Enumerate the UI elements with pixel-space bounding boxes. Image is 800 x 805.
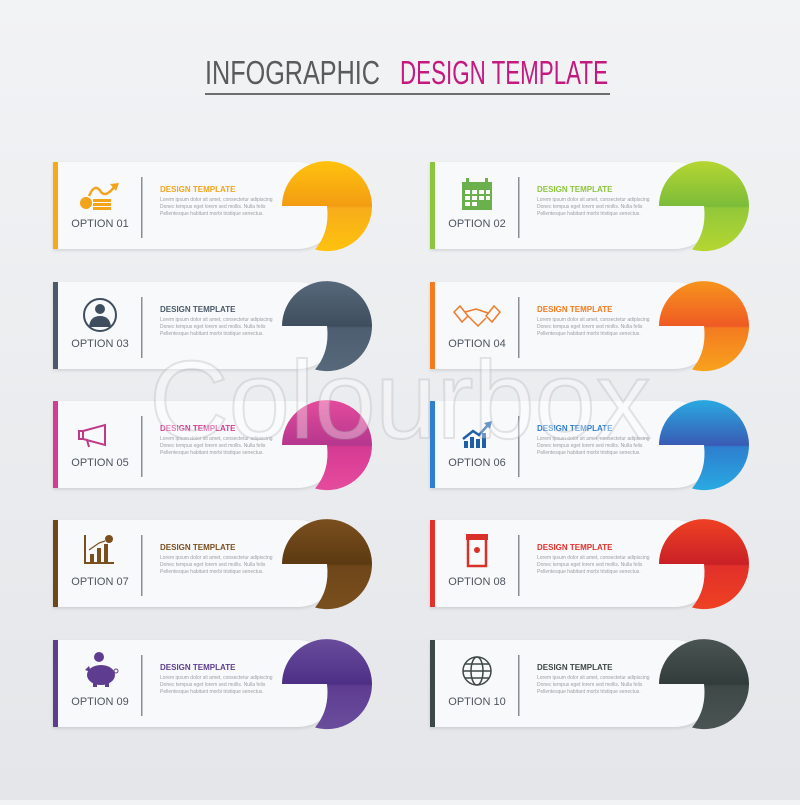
icon: money growth <box>80 183 119 210</box>
card: option 10: Pellentesque habitant morbi tristique senectus. <box>537 689 641 695</box>
card: option 09: Lorem ipsum dolor sit amet, consectetur adipiscing <box>160 675 273 681</box>
card: option 08: Pellentesque habitant morbi tristique senectus. <box>537 569 641 575</box>
card: option 01: DESIGN TEMPLATE <box>160 185 236 194</box>
card: option 05: Pellentesque habitant morbi tristique senectus. <box>160 450 264 456</box>
card: option 07: Donec tempus eget lorem sed mollis. Nulla felis <box>160 562 266 568</box>
title: DESIGN TEMPLATE <box>400 54 608 91</box>
card: option 07: Pellentesque habitant morbi tristique senectus. <box>160 569 264 575</box>
card: option 06: Lorem ipsum dolor sit amet, consectetur adipiscing <box>537 436 650 442</box>
icon: businessman <box>84 299 116 331</box>
card: option 01 <box>53 161 372 251</box>
icon: handshake <box>454 306 500 326</box>
card: option 04: Lorem ipsum dolor sit amet, consectetur adipiscing <box>537 317 650 323</box>
card: option 02: Pellentesque habitant morbi tristique senectus. <box>537 211 641 217</box>
title: INFOGRAPHIC <box>205 54 380 91</box>
card: option 10: Lorem ipsum dolor sit amet, consectetur adipiscing <box>537 675 650 681</box>
card: option 08 <box>430 519 749 609</box>
card: option 05: Donec tempus eget lorem sed mollis. Nulla felis <box>160 443 266 449</box>
card: option 05 <box>53 400 372 490</box>
card: option 03: DESIGN TEMPLATE <box>160 305 236 314</box>
card: option 06: Pellentesque habitant morbi tristique senectus. <box>537 450 641 456</box>
card: option 07: OPTION 07 <box>71 576 129 588</box>
icon: calendar <box>462 178 492 210</box>
card: option 04: Pellentesque habitant morbi tristique senectus. <box>537 331 641 337</box>
card: option 10: OPTION 10 <box>448 696 506 708</box>
card: option 01: Pellentesque habitant morbi tristique senectus. <box>160 211 264 217</box>
card: option 05: OPTION 05 <box>71 457 129 469</box>
card: option 08: Lorem ipsum dolor sit amet, consectetur adipiscing <box>537 555 650 561</box>
card: option 02 <box>430 161 749 251</box>
card: option 06: DESIGN TEMPLATE <box>537 424 613 433</box>
icon: piggy bank <box>85 652 118 687</box>
card: option 02: Donec tempus eget lorem sed mollis. Nulla felis <box>537 204 643 210</box>
card: option 06: Donec tempus eget lorem sed mollis. Nulla felis <box>537 443 643 449</box>
card: option 06: OPTION 06 <box>448 457 506 469</box>
icon: document <box>466 534 488 566</box>
card: option 02: Lorem ipsum dolor sit amet, consectetur adipiscing <box>537 197 650 203</box>
card: option 09: OPTION 09 <box>71 696 129 708</box>
card: option 03: Lorem ipsum dolor sit amet, consectetur adipiscing <box>160 317 273 323</box>
card: option 03: OPTION 03 <box>71 338 129 350</box>
card: option 08: DESIGN TEMPLATE <box>537 543 613 552</box>
icon: globe <box>463 657 491 685</box>
card: option 10 <box>430 639 749 729</box>
card: option 01: Lorem ipsum dolor sit amet, consectetur adipiscing <box>160 197 273 203</box>
card: option 05: DESIGN TEMPLATE <box>160 424 236 433</box>
icon: chart up <box>463 421 492 448</box>
card: option 03: Donec tempus eget lorem sed mollis. Nulla felis <box>160 324 266 330</box>
card: option 08: Donec tempus eget lorem sed mollis. Nulla felis <box>537 562 643 568</box>
card: option 06 <box>430 400 749 490</box>
card: option 04: Donec tempus eget lorem sed mollis. Nulla felis <box>537 324 643 330</box>
card: option 03: Pellentesque habitant morbi tristique senectus. <box>160 331 264 337</box>
card: option 07 <box>53 519 372 609</box>
card: option 02: DESIGN TEMPLATE <box>537 185 613 194</box>
card: option 07: DESIGN TEMPLATE <box>160 543 236 552</box>
watermark: Colourbox <box>149 339 651 462</box>
icon: bar chart with dollar <box>84 535 114 564</box>
card: option 03 <box>53 281 372 371</box>
card: option 02: OPTION 02 <box>448 218 506 230</box>
card: option 09: DESIGN TEMPLATE <box>160 663 236 672</box>
card: option 04: DESIGN TEMPLATE <box>537 305 613 314</box>
card: option 04 <box>430 281 749 371</box>
card: option 08: OPTION 08 <box>448 576 506 588</box>
card: option 10: Donec tempus eget lorem sed mollis. Nulla felis <box>537 682 643 688</box>
card: option 09: Donec tempus eget lorem sed mollis. Nulla felis <box>160 682 266 688</box>
card: option 10: DESIGN TEMPLATE <box>537 663 613 672</box>
card: option 09: Pellentesque habitant morbi tristique senectus. <box>160 689 264 695</box>
card: option 09 <box>53 639 372 729</box>
icon: megaphone <box>79 425 105 447</box>
card: option 05: Lorem ipsum dolor sit amet, consectetur adipiscing <box>160 436 273 442</box>
card: option 01: OPTION 01 <box>71 218 129 230</box>
card: option 07: Lorem ipsum dolor sit amet, consectetur adipiscing <box>160 555 273 561</box>
title <box>205 54 610 95</box>
card: option 01: Donec tempus eget lorem sed mollis. Nulla felis <box>160 204 266 210</box>
card: option 04: OPTION 04 <box>448 338 506 350</box>
